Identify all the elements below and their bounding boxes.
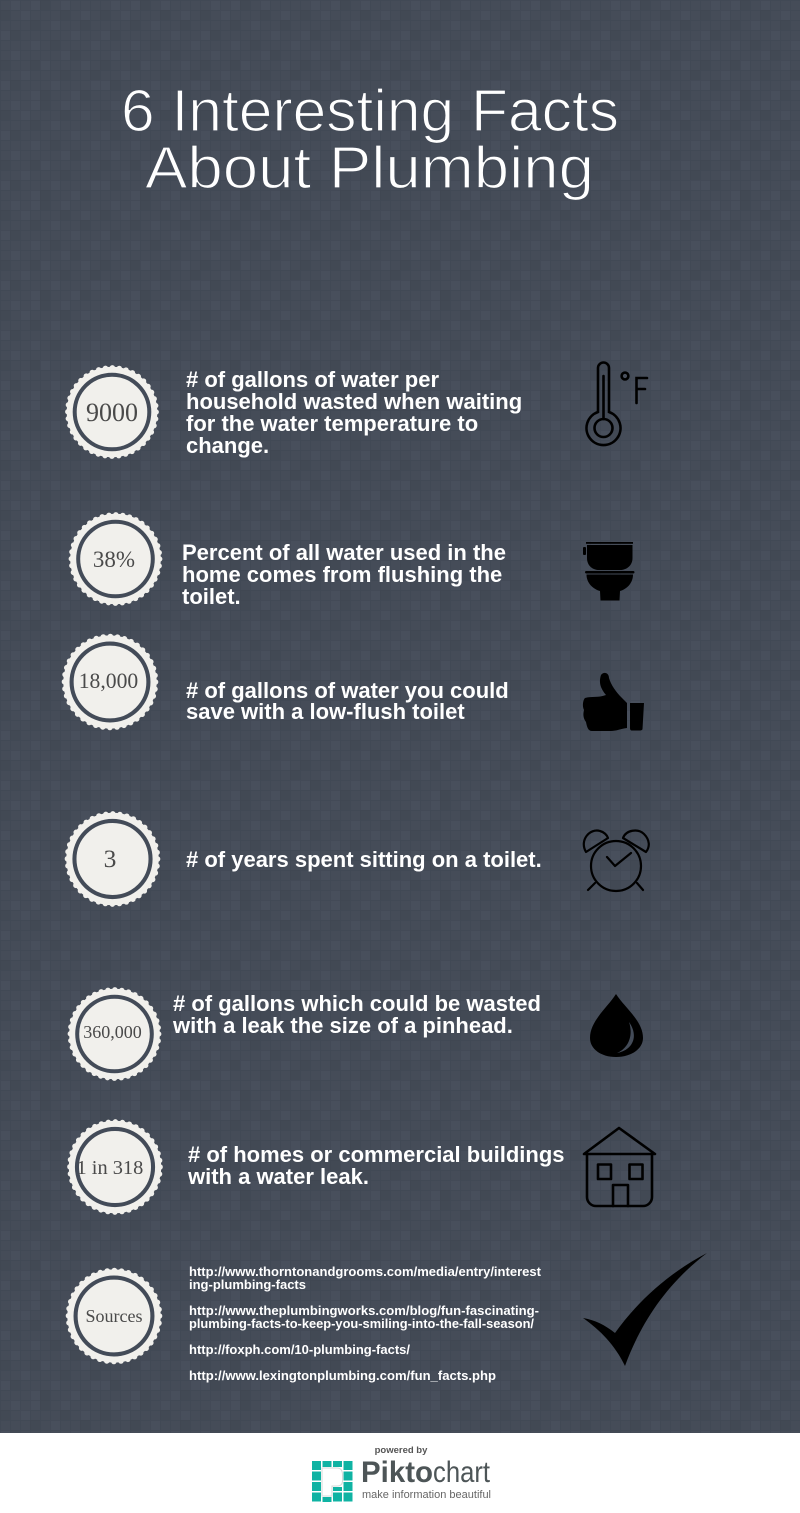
badge: 18,000 (63, 635, 157, 729)
fact text 2: home comes from flushing the (182, 562, 502, 587)
source links: http://www.lexingtonplumbing.com/fun_facts.php (189, 1368, 496, 1383)
badge: Sources (67, 1269, 161, 1363)
fact text 2: Percent of all water used in the (182, 540, 506, 565)
fact text 1: # of gallons of water per (186, 367, 439, 392)
badge: 3: 3 (104, 844, 116, 873)
badge: 360,000: 360,000 (83, 1022, 142, 1042)
fact 2: 38 percent (70, 514, 634, 609)
fact text 5 (172, 991, 541, 1038)
title: About Plumbing (145, 135, 594, 201)
title: 6 Interesting Facts (121, 78, 619, 144)
fact text 1 (186, 367, 522, 458)
icon: alarm clock (584, 831, 649, 891)
icon: toilet (583, 542, 634, 600)
fact text 5: with a leak the size of a pinhead. (172, 1013, 513, 1038)
fact text 5: # of gallons which could be wasted (173, 991, 541, 1016)
fact text 1: for the water temperature to (186, 411, 478, 436)
piktochart wordmark (361, 1456, 491, 1501)
fact 6: 1 in 318 (69, 1121, 655, 1213)
fact text 6: with a water leak. (187, 1164, 369, 1189)
fact 4: 3 years (66, 813, 649, 905)
piktochart wordmark: Pikto (361, 1456, 433, 1489)
footer band (0, 1433, 800, 1513)
fact text 3: # of gallons of water you could (186, 678, 509, 703)
source links: http://www.theplumbingworks.com/blog/fun-fascinating- (189, 1303, 539, 1318)
fact text 3 (186, 678, 509, 724)
fact text 6: # of homes or commercial buildings (188, 1142, 565, 1167)
fact text 1: household wasted when waiting (186, 389, 522, 414)
piktochart wordmark: chart (433, 1456, 491, 1489)
powered by label: powered by (375, 1445, 428, 1456)
icon: house (584, 1128, 655, 1206)
badge: 38%: 38% (93, 547, 135, 572)
source links: http://www.thorntonandgrooms.com/media/entry/interest (189, 1264, 542, 1279)
title (121, 78, 619, 201)
fact text 2: toilet. (182, 584, 241, 609)
badge: 9000: 9000 (86, 398, 138, 427)
icon: thumbs up (583, 673, 644, 731)
piktochart wordmark: make information beautiful (362, 1489, 491, 1501)
fact text 6 (187, 1142, 565, 1189)
fact 1: 9000 gallons waiting for temperature (67, 363, 647, 458)
badge: 3 (66, 813, 159, 905)
badge: 18,000: 18,000 (79, 669, 138, 693)
badge: 360,000 (69, 989, 160, 1079)
sources (67, 1253, 707, 1383)
fact text 4: # of years spent sitting on a toilet. (186, 847, 542, 872)
fact text 2 (182, 540, 506, 609)
source links (189, 1264, 542, 1383)
piktochart logo mark (312, 1461, 352, 1502)
badge: 1 in 318: 1 in 318 (76, 1157, 143, 1179)
icon: thermometer (586, 363, 647, 445)
badge: Sources: Sources (85, 1306, 143, 1326)
badge: 9000 (67, 367, 157, 457)
badge: 1 in 318 (69, 1121, 161, 1213)
icon: check mark (583, 1253, 707, 1366)
fact text 3: save with a low-flush toilet (186, 699, 465, 724)
source links: plumbing-facts-to-keep-you-smiling-into-the-fall-season/ (189, 1316, 534, 1331)
fact text 1: change. (186, 433, 269, 458)
source links: http://foxph.com/10-plumbing-facts/ (189, 1342, 410, 1357)
source links: ing-plumbing-facts (189, 1277, 306, 1292)
icon: water drop (590, 994, 643, 1057)
fact 3: 18,000 (63, 635, 644, 731)
badge: 38% (70, 514, 161, 604)
fact 5: 360,000 (69, 989, 643, 1079)
